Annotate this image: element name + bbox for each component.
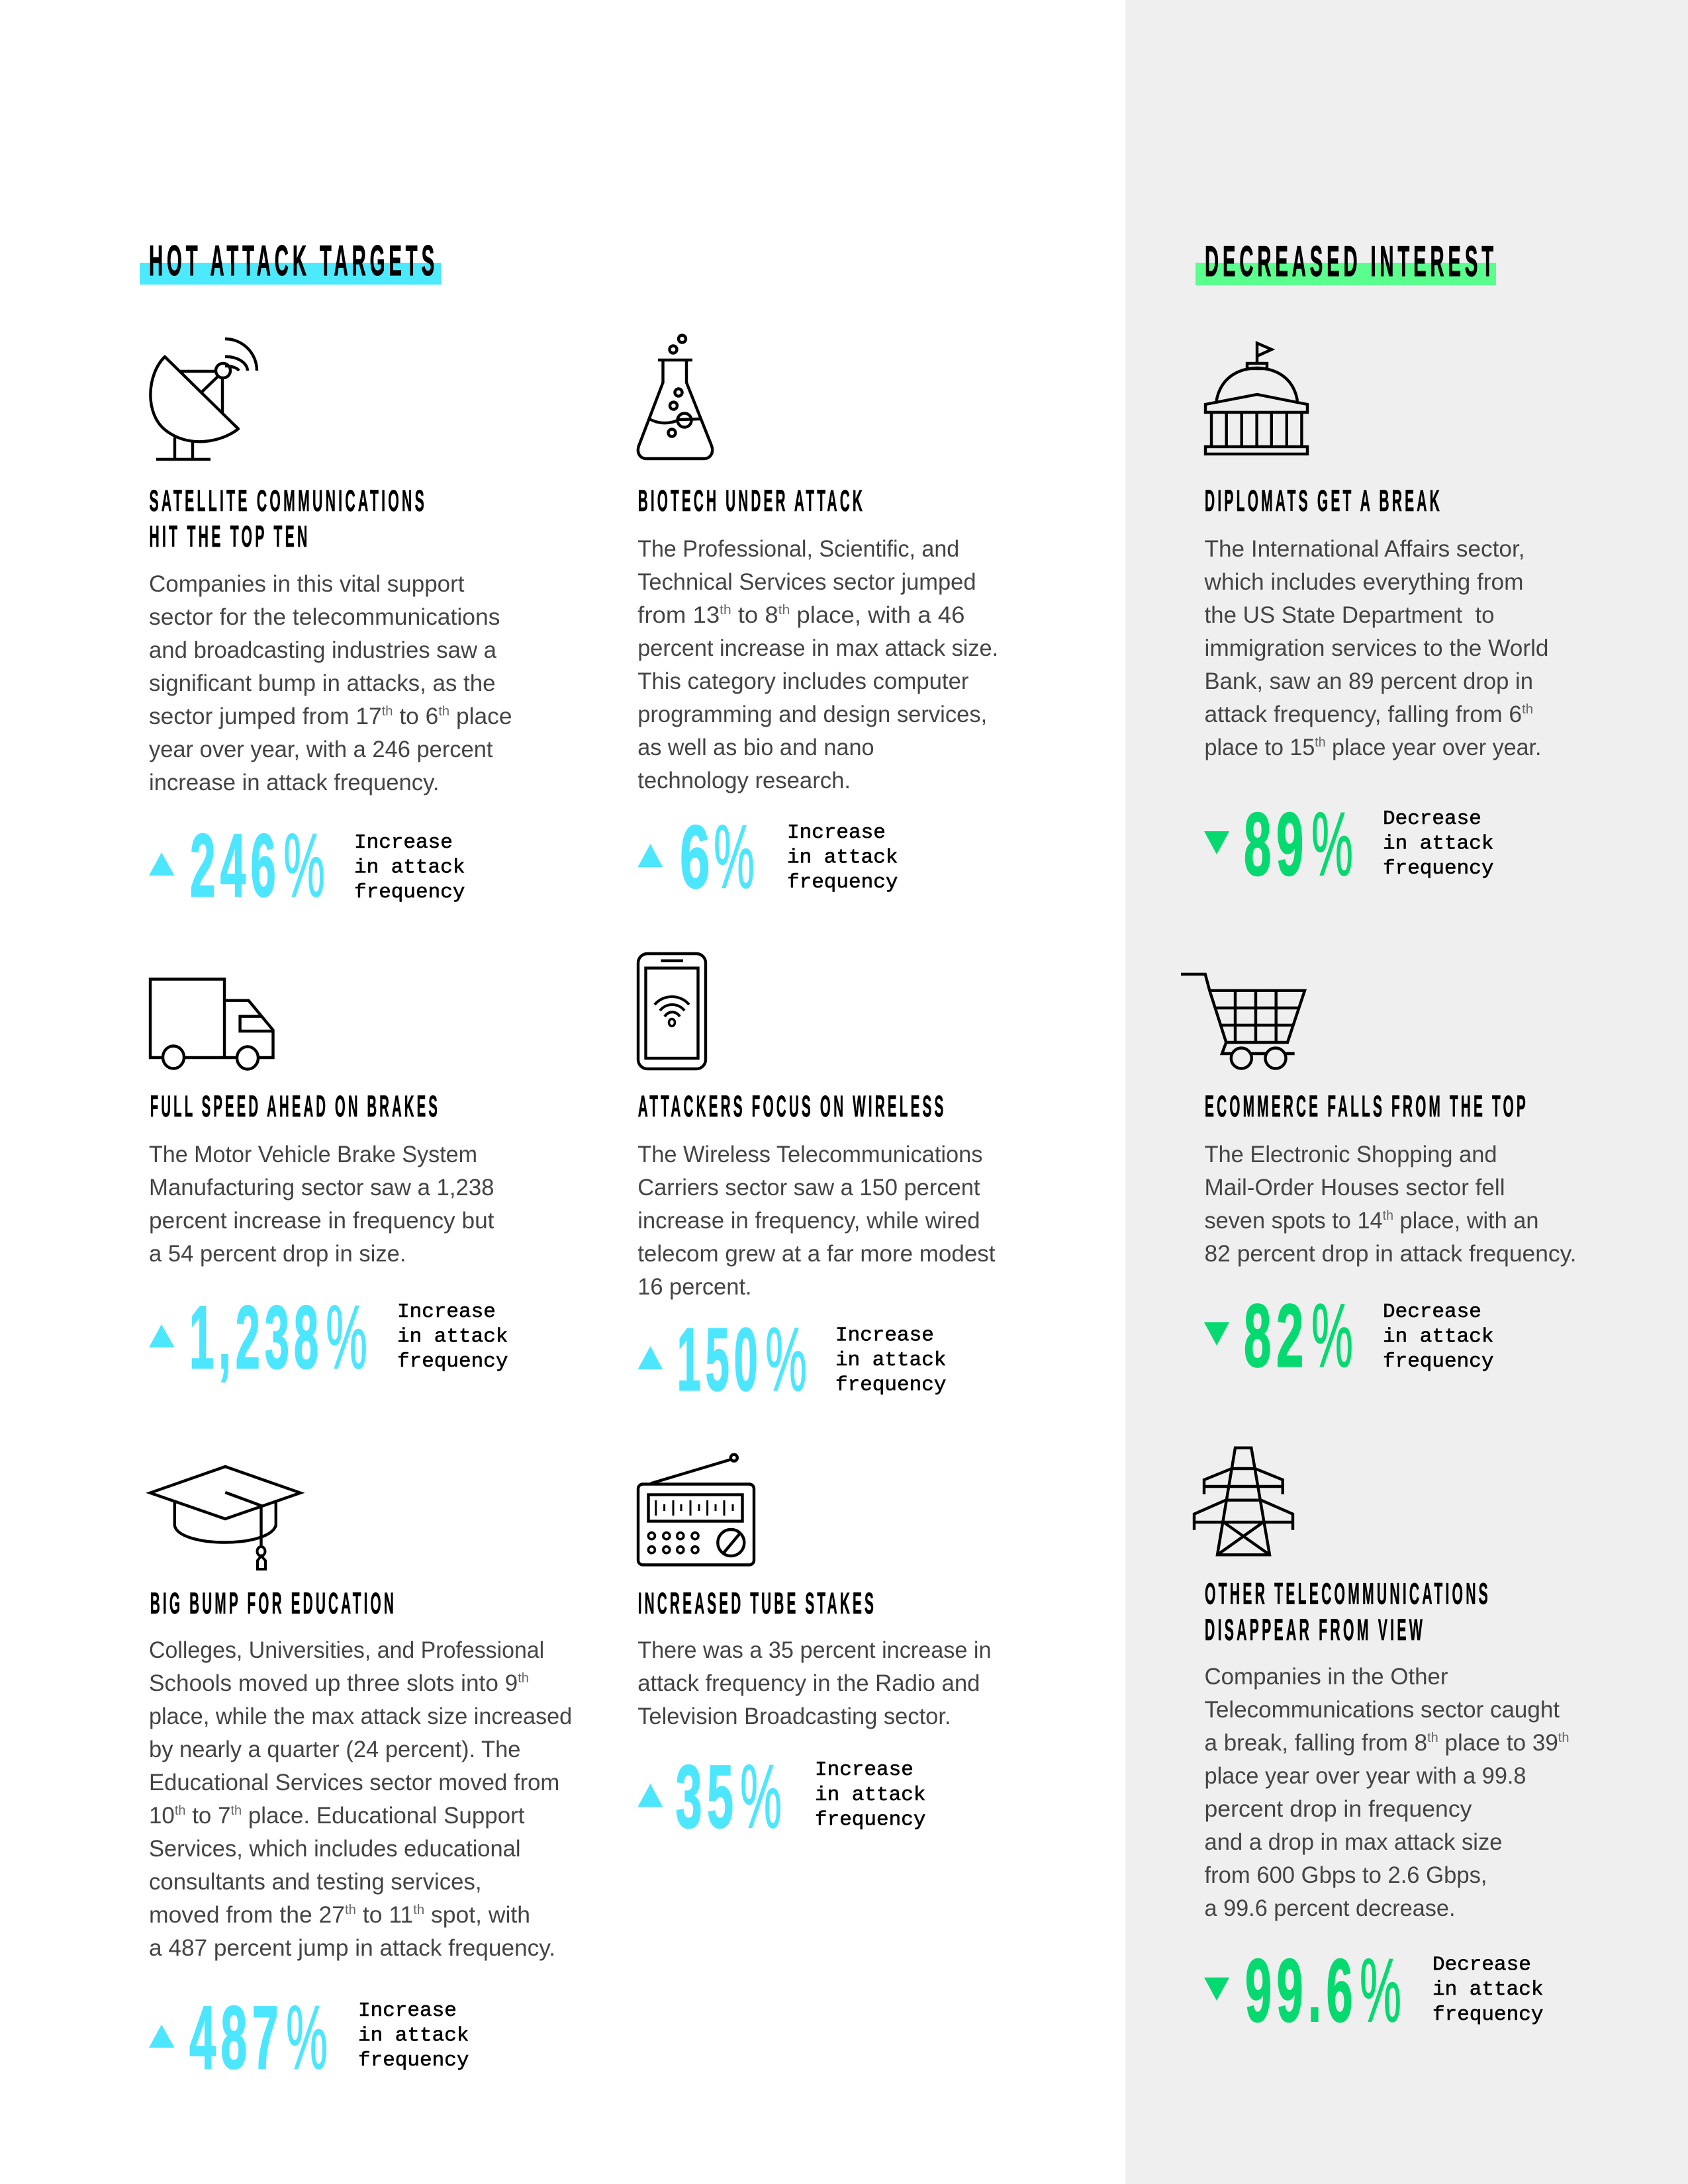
body text: which includes everything from: [1203, 569, 1524, 595]
body text: Companies in this vital support: [149, 571, 465, 597]
body text: [1203, 536, 1549, 760]
body text: increase in attack frequency.: [149, 770, 440, 796]
stat: 82% decrease: frequency: [1383, 1350, 1493, 1373]
panel: other telecommunications: [1194, 1448, 1569, 2041]
stat: 82% decrease: 82: [1244, 1285, 1309, 1386]
icon: flask: [638, 335, 712, 459]
heading: [1205, 1576, 1491, 1647]
body text: The Electronic Shopping and: [1205, 1142, 1497, 1167]
body text: by nearly a quarter (24 percent). The: [149, 1737, 520, 1762]
stat: 6% increase: Increase: [787, 821, 886, 844]
body text: th: [438, 704, 449, 719]
body text: Television Broadcasting sector.: [637, 1704, 951, 1729]
icon: truck: [150, 979, 273, 1069]
body text: a 54 percent drop in size.: [149, 1241, 406, 1267]
stat: 35% increase: Increase: [815, 1758, 914, 1782]
body text: place year over year with a 99.8: [1205, 1763, 1526, 1789]
body text: th: [518, 1671, 529, 1686]
stat: 89% decrease: [1204, 794, 1493, 895]
stat: 1,238% increase: 1,238: [189, 1287, 323, 1387]
panel: big bump for education: BIG BUMP FOR EDUCATION: [150, 1586, 397, 1620]
stat: 82% decrease: Decrease: [1383, 1300, 1481, 1324]
body text: from 13: [637, 602, 716, 628]
body text: th: [1383, 1208, 1393, 1223]
body text: 16 percent.: [637, 1274, 752, 1300]
body text: Manufacturing sector saw a 1,238: [149, 1175, 494, 1201]
stat: 487% increase: frequency: [358, 2049, 469, 2072]
body text: technology research.: [637, 768, 851, 794]
body text: sector for the telecommunications: [149, 604, 500, 630]
stat: 6% increase: 6: [680, 807, 716, 907]
icon: shopping cart: [1181, 974, 1305, 1068]
body text: to 11: [356, 1902, 413, 1928]
icon: smartphone with wifi: [638, 954, 706, 1069]
stat: 6% increase: in attack: [787, 846, 898, 870]
stat: 150% increase: frequency: [835, 1374, 946, 1396]
body text: [149, 1142, 494, 1267]
stat: 89% decrease: Decrease: [1383, 807, 1481, 831]
stat: 99.6% decrease: [1204, 1940, 1543, 2041]
icon: satellite dish: [150, 339, 257, 460]
panel: increased tube stakes: [637, 1455, 992, 1848]
body text: [149, 571, 512, 796]
body text: Carriers sector saw a 150 percent: [637, 1175, 980, 1201]
stat: 6% increase: [638, 806, 898, 908]
body text: 82 percent drop in attack frequency.: [1205, 1241, 1577, 1267]
panel: biotech under attack: [637, 335, 998, 908]
body text: year over year, with a 246 percent: [149, 737, 493, 762]
body text: Companies in the Other: [1205, 1664, 1448, 1690]
body text: [149, 1637, 572, 1961]
body text: Schools moved up three slots into 9: [149, 1670, 516, 1696]
stat: 487% increase: in attack: [358, 2024, 469, 2048]
body text: [1205, 1142, 1577, 1267]
icon: radio: [638, 1455, 754, 1565]
body text: increase in frequency, while wired: [637, 1208, 980, 1234]
body text: and a drop in max attack size: [1205, 1829, 1503, 1855]
body text: Technical Services sector jumped: [637, 569, 976, 595]
body text: the US State Department to: [1205, 602, 1495, 628]
panel: full speed ahead on brakes: FULL SPEED AHEAD ON BRAKES: [150, 1089, 440, 1123]
body text: consultants and testing services,: [149, 1869, 482, 1895]
stat: 89% decrease: 89: [1244, 794, 1309, 894]
body text: place. Educational Support: [242, 1803, 525, 1829]
stat: 150% increase: 150: [677, 1309, 763, 1410]
icon: graduation cap: [150, 1467, 301, 1569]
stat: 150% increase: %: [765, 1309, 807, 1410]
stat: 99.6% decrease: 99.6: [1245, 1940, 1358, 2040]
body text: This category includes computer: [637, 668, 969, 694]
stat: 89% decrease: in attack: [1383, 833, 1493, 855]
body text: [637, 536, 998, 794]
stat: 35% increase: in attack: [815, 1784, 925, 1807]
body text: place to 39: [1438, 1730, 1558, 1756]
body text: The International Affairs sector,: [1205, 536, 1525, 562]
body text: th: [413, 1903, 424, 1917]
stat: 82% decrease: %: [1311, 1285, 1353, 1387]
body text: percent drop in frequency: [1205, 1796, 1472, 1822]
stat: 150% increase: in attack: [835, 1349, 946, 1372]
body text: The Wireless Telecommunications: [637, 1142, 982, 1167]
body text: to 7: [186, 1803, 231, 1829]
body text: place, with an: [1393, 1208, 1538, 1234]
body text: as well as bio and nano: [637, 735, 874, 760]
body text: place, while the max attack size increased: [149, 1704, 572, 1729]
body text: place, with a 46: [790, 602, 965, 628]
body text: The Motor Vehicle Brake System: [149, 1142, 477, 1167]
icon: transmission tower: [1194, 1448, 1293, 1555]
stat: 246% increase: in attack: [354, 856, 465, 879]
stat: 246% increase: [149, 815, 465, 916]
body text: moved from the 27: [149, 1902, 342, 1928]
body text: Telecommunications sector caught: [1205, 1697, 1560, 1723]
stat: 487% increase: %: [286, 1987, 328, 2089]
stat: 6% increase: %: [714, 806, 755, 908]
body text: There was a 35 percent increase in: [637, 1637, 992, 1663]
body text: and broadcasting industries saw a: [149, 637, 497, 663]
body text: th: [1427, 1731, 1438, 1745]
body text: Bank, saw an 89 percent drop in: [1205, 668, 1533, 694]
body text: Services, which includes educational: [149, 1836, 520, 1862]
body text: immigration services to the World: [1205, 635, 1549, 661]
body text: spot, with: [424, 1902, 530, 1928]
stat: 1,238% increase: in attack: [397, 1325, 508, 1349]
panel: decreased interest background: [1125, 0, 1688, 2184]
stat: 150% increase: Increase: [835, 1324, 934, 1347]
heading: DISAPPEAR FROM VIEW: [1205, 1613, 1425, 1647]
heading: HIT THE TOP TEN: [150, 520, 310, 553]
panel: diplomats get a break: [1203, 343, 1549, 895]
body text: th: [382, 704, 393, 719]
body text: telecom grew at a far more modest: [637, 1241, 996, 1267]
stat: 246% increase: %: [283, 815, 325, 916]
body text: percent increase in max attack size.: [637, 635, 998, 661]
body text: th: [175, 1803, 186, 1818]
stat: 35% increase: 35: [675, 1747, 739, 1846]
stat: 99.6% decrease: Decrease: [1432, 1954, 1531, 1976]
body text: to 6: [393, 704, 438, 729]
body text: th: [231, 1803, 242, 1818]
body text: seven spots to 14: [1205, 1208, 1386, 1234]
heading: [150, 484, 427, 553]
panel: biotech under attack: BIOTECH UNDER ATTACK: [638, 484, 865, 518]
body text: place: [449, 704, 512, 729]
stat: 1,238% increase: frequency: [397, 1350, 508, 1373]
body text: 10: [149, 1803, 175, 1829]
stat: 487% increase: [149, 1987, 469, 2089]
body text: programming and design services,: [637, 702, 987, 727]
title: hot attack targets: [140, 236, 441, 285]
stat: 99.6% decrease: in attack: [1432, 1978, 1543, 2001]
body text: [1205, 1664, 1569, 1921]
body text: a break, falling from 8: [1205, 1730, 1427, 1756]
stat: 1,238% increase: Increase: [397, 1300, 496, 1324]
body text: percent increase in frequency but: [149, 1208, 494, 1234]
stat: 99.6% decrease: frequency: [1432, 2003, 1543, 2026]
stat: 246% increase: Increase: [354, 831, 453, 854]
stat: 150% increase: [638, 1309, 946, 1410]
body text: sector jumped from 17: [149, 704, 379, 729]
stat: 89% decrease: %: [1311, 794, 1353, 895]
body text: a 99.6 percent decrease.: [1205, 1895, 1455, 1921]
body text: from 600 Gbps to 2.6 Gbps,: [1205, 1862, 1487, 1888]
body text: The Professional, Scientific, and: [637, 536, 959, 562]
body text: th: [1558, 1731, 1569, 1745]
body text: attack frequency in the Radio and: [637, 1670, 980, 1696]
panel: ecommerce falls from the top: [1181, 974, 1577, 1387]
stat: 35% increase: frequency: [815, 1808, 925, 1832]
panel: big bump for education: [149, 1467, 572, 2089]
stat: 35% increase: %: [740, 1746, 782, 1848]
body text: th: [1522, 702, 1533, 717]
stat: 487% increase: 487: [189, 1987, 283, 2087]
stat: 82% decrease: [1204, 1285, 1493, 1387]
body text: to 8: [731, 602, 778, 628]
body text: a 487 percent jump in attack frequency.: [149, 1935, 555, 1961]
stat: 246% increase: 246: [190, 815, 281, 915]
body text: Mail-Order Houses sector fell: [1205, 1175, 1505, 1201]
stat: 89% decrease: frequency: [1383, 857, 1493, 880]
body text: [637, 1637, 992, 1729]
panel: satellite communications: SATELLITE COMMUNICATIONS: [150, 484, 427, 518]
stat: 487% increase: Increase: [358, 1999, 457, 2023]
stat: 35% increase: [638, 1746, 925, 1848]
body text: Educational Services sector moved from: [149, 1770, 559, 1796]
stat: 1,238% increase: %: [326, 1287, 367, 1388]
panel: full speed ahead on brakes: [149, 979, 508, 1388]
title: decreased interest: [1196, 237, 1497, 285]
body text: place to 15: [1205, 735, 1318, 760]
body text: [637, 1142, 996, 1300]
body text: Colleges, Universities, and Professional: [149, 1637, 544, 1663]
body text: significant bump in attacks, as the: [149, 670, 495, 696]
body text: place year over year.: [1326, 735, 1541, 760]
stat: 82% decrease: in attack: [1383, 1325, 1493, 1349]
panel: satellite communications: [149, 339, 512, 916]
body text: attack frequency, falling from 6: [1205, 702, 1519, 727]
body text: th: [345, 1903, 356, 1917]
stat: 99.6% decrease: %: [1360, 1940, 1401, 2041]
body text: th: [778, 603, 790, 617]
text: HOT ATTACK TARGETS: [149, 236, 438, 285]
body text: th: [1315, 735, 1326, 750]
stat: 6% increase: frequency: [787, 871, 898, 894]
panel: attackers focus on wireless: [637, 954, 996, 1410]
panel: increased tube stakes: INCREASED TUBE STAKES: [638, 1586, 876, 1620]
stat: 246% increase: frequency: [354, 881, 465, 904]
body text: th: [720, 603, 731, 617]
icon: capitol building: [1205, 343, 1307, 454]
panel: attackers focus on wireless: ATTACKERS FOCUS ON WIRELESS: [638, 1089, 947, 1123]
